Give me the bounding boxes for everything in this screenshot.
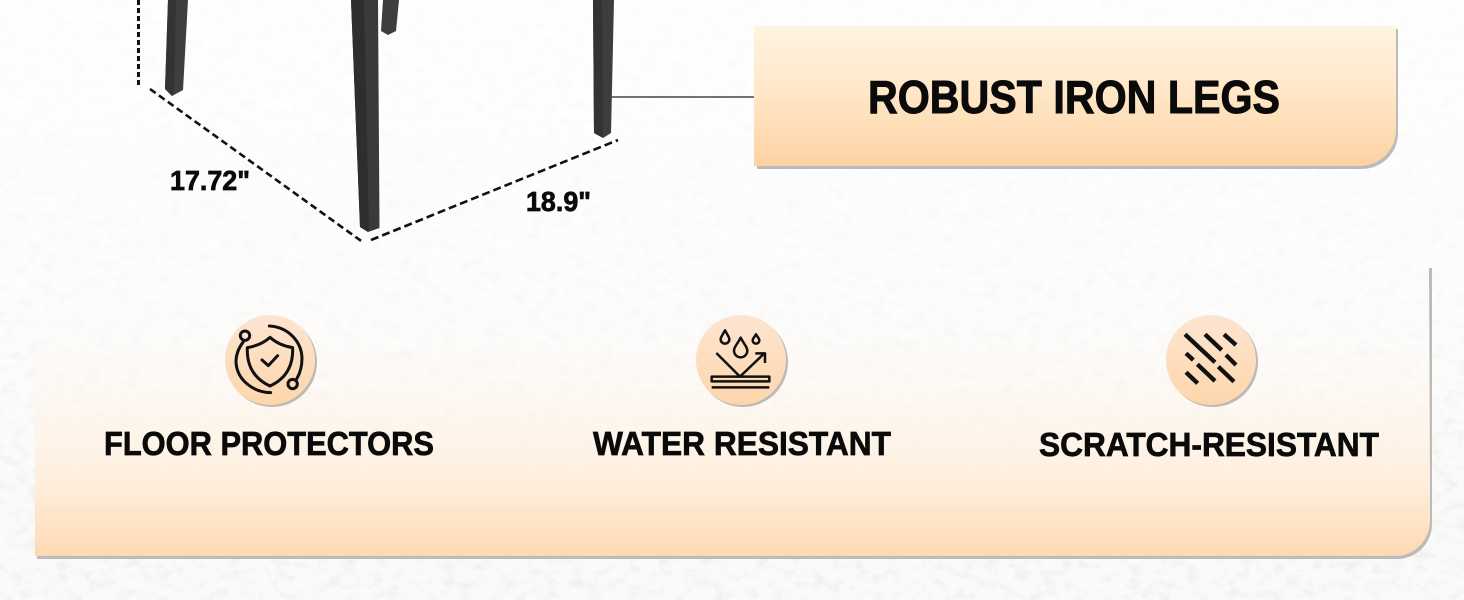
inner rear leg <box>381 0 399 35</box>
label: WATER RESISTANT <box>593 425 891 462</box>
feature: floor protectors <box>104 315 434 462</box>
icon: scratches <box>1166 315 1258 407</box>
width dimension label: 18.9" <box>526 186 591 217</box>
chair legs <box>165 0 614 232</box>
connector line to callout <box>609 96 754 98</box>
front corner leg <box>351 0 380 232</box>
rear left leg <box>165 0 188 96</box>
right leg <box>593 0 614 138</box>
callout panel: robust iron legs <box>754 26 1398 169</box>
label: FLOOR PROTECTORS <box>104 425 434 462</box>
depth dashed dimension line <box>150 89 364 243</box>
features panel <box>35 268 1432 559</box>
feature: water resistant <box>593 315 891 462</box>
width dashed dimension line <box>371 140 618 240</box>
icon: water drops <box>696 315 788 407</box>
height dashed dimension line <box>137 0 140 85</box>
label: SCRATCH-RESISTANT <box>1039 426 1379 463</box>
feature: scratch-resistant <box>1039 315 1379 463</box>
callout heading: ROBUST IRON LEGS <box>868 71 1280 123</box>
icon: shield with check <box>225 315 317 407</box>
depth dimension label: 17.72" <box>170 165 250 196</box>
